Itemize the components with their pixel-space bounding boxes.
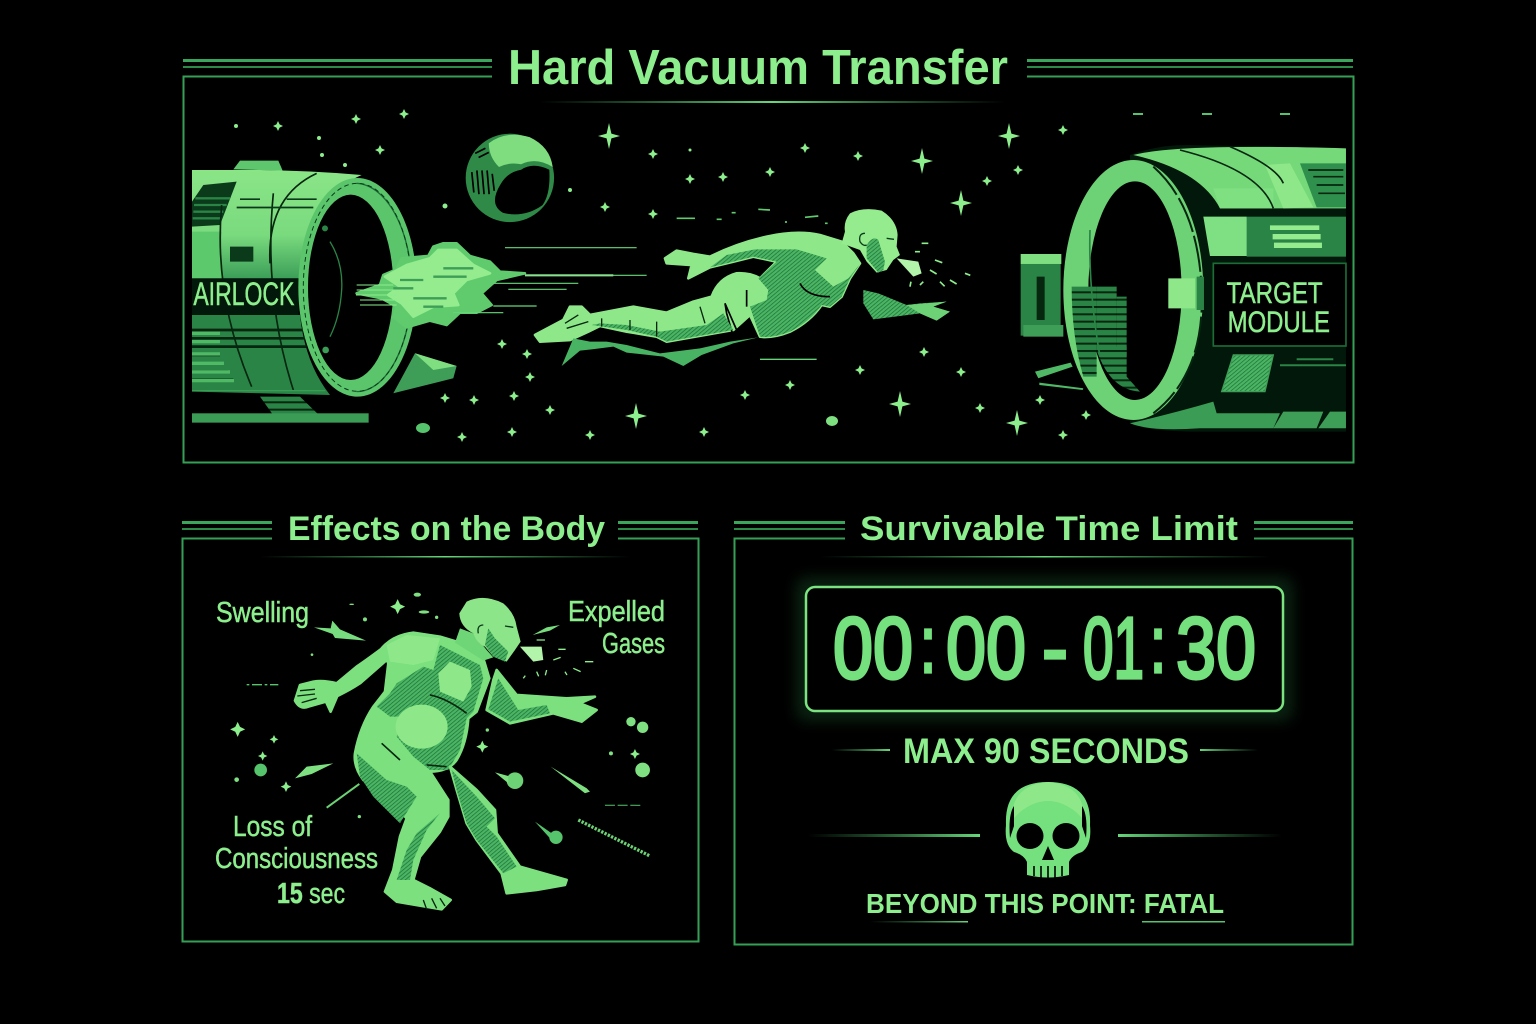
heading: survivable time limit xyxy=(734,505,1353,558)
timer display: - xyxy=(1042,600,1068,697)
toes xyxy=(423,898,445,909)
airlock hull xyxy=(192,161,457,423)
timer display: : xyxy=(920,600,936,689)
belly crease xyxy=(382,695,467,767)
label: swelling: Swelling xyxy=(216,597,309,629)
target hull xyxy=(1130,145,1346,432)
target module xyxy=(1021,145,1346,432)
timer display: : xyxy=(1150,600,1166,689)
head xyxy=(842,209,900,273)
body figure with debris xyxy=(230,593,650,909)
hip crease xyxy=(725,283,830,337)
target ring xyxy=(1063,160,1204,420)
chest highlight xyxy=(438,662,472,702)
airlock ring xyxy=(298,178,417,397)
label: expelled gases: Gases xyxy=(602,628,665,660)
arrow: expelled gases xyxy=(533,625,560,635)
torso and hips xyxy=(355,633,489,909)
panel: effects on the body xyxy=(182,505,698,942)
skull warning icon xyxy=(808,782,1282,878)
trailing leg xyxy=(450,767,567,893)
heading: effects on the body: Effects on the Body xyxy=(288,510,605,548)
label: loss of consciousness: Consciousness xyxy=(215,843,378,875)
neck xyxy=(455,628,493,661)
leg shadow xyxy=(592,313,733,342)
heading: survivable time limit: Survivable Time Limit xyxy=(860,510,1238,548)
target label xyxy=(1227,277,1330,339)
expelled gas spray xyxy=(520,647,543,662)
back arm xyxy=(295,645,387,712)
label: expelled gases xyxy=(568,596,665,660)
timer display: 00 xyxy=(946,600,1026,697)
timer display: 00 xyxy=(833,600,913,697)
front arm xyxy=(487,670,597,723)
shoulder highlight xyxy=(387,635,440,665)
timer display: 30 xyxy=(1176,600,1256,697)
star field xyxy=(234,109,1290,442)
front arm xyxy=(863,290,950,321)
belly highlight xyxy=(396,705,448,749)
heading: effects on the body xyxy=(182,505,698,558)
body silhouette xyxy=(535,233,860,342)
panel: hard vacuum transfer scene xyxy=(184,76,1354,462)
torso shadow xyxy=(710,249,860,337)
timer display xyxy=(796,577,1293,721)
label: loss of consciousness xyxy=(215,811,378,910)
title: Hard Vacuum Transfer xyxy=(508,41,1008,95)
label: expelled gases: Expelled xyxy=(568,596,665,628)
label: loss of consciousness: 15 sec xyxy=(277,878,345,910)
airlock xyxy=(192,161,647,423)
timer display: 01 xyxy=(1083,600,1144,697)
foot detail xyxy=(565,307,705,337)
torso shadow hatching xyxy=(357,645,483,880)
lower leg xyxy=(562,337,758,366)
target label: MODULE xyxy=(1228,306,1330,339)
panel: survivable time limit xyxy=(734,505,1353,944)
label: loss of consciousness: Loss of xyxy=(233,811,313,843)
head xyxy=(459,598,521,662)
expelled gas xyxy=(897,258,922,277)
floating figure xyxy=(535,209,970,366)
beyond this point fatal: BEYOND THIS POINT: FATAL xyxy=(866,888,1224,919)
back hand fingers xyxy=(297,689,317,703)
airlock label band: AIRLOCK xyxy=(193,276,294,312)
title xyxy=(183,40,1353,103)
airlock label band xyxy=(192,276,299,315)
max 90 seconds: MAX 90 SECONDS xyxy=(903,732,1189,771)
target label: TARGET xyxy=(1227,277,1323,310)
escaping air cloud xyxy=(356,243,525,327)
target docking stub xyxy=(1021,254,1083,390)
debris and stars xyxy=(230,593,650,856)
air streaks xyxy=(453,248,647,313)
planet xyxy=(466,134,554,222)
arrow: swelling xyxy=(314,621,366,641)
